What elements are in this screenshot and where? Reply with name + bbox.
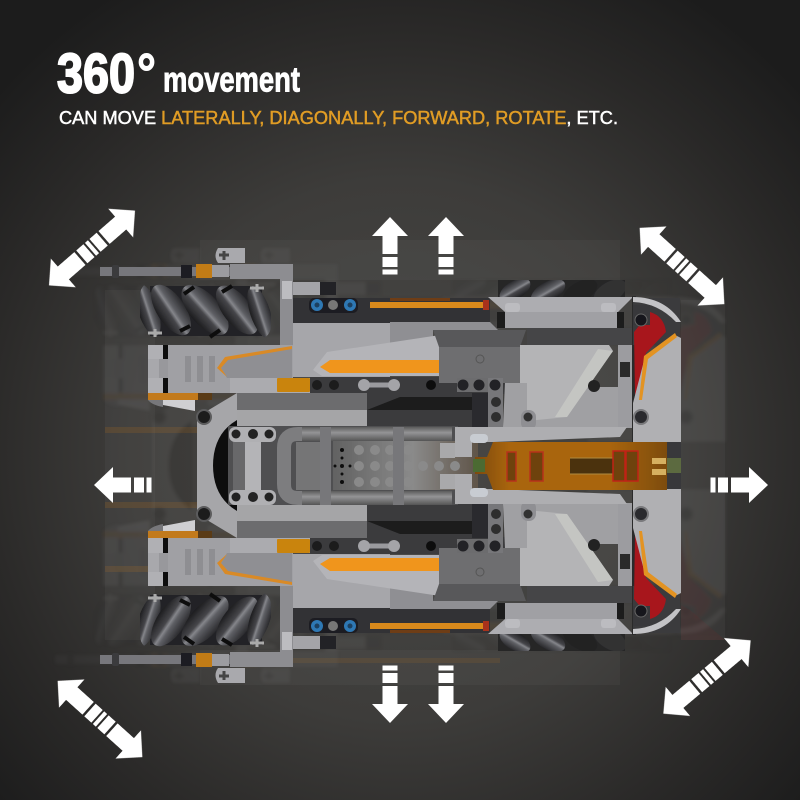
motion ghost of vehicle	[55, 248, 726, 683]
arrow: diagonal upper left	[37, 196, 147, 300]
front bumper centre	[667, 442, 681, 489]
front column	[618, 345, 632, 428]
motion ghost panels	[105, 240, 725, 685]
front clip top	[455, 427, 627, 457]
front corner dark	[633, 298, 680, 345]
side panel light	[390, 322, 498, 345]
rear axle rod	[100, 264, 230, 278]
central dark block	[367, 393, 488, 427]
rear hull grey	[197, 393, 367, 466]
light plate	[503, 345, 630, 427]
orange wing panel	[313, 335, 440, 376]
rear bracket	[229, 427, 276, 505]
dark cross bar	[527, 328, 632, 345]
dark centre strip	[310, 377, 505, 394]
arrow: diagonal lower right	[651, 626, 763, 728]
front wheel	[496, 274, 631, 310]
red light	[634, 312, 666, 396]
dark chassis strip	[293, 298, 490, 328]
vehicle top half	[100, 248, 681, 466]
blue pin beam	[309, 298, 358, 313]
orange rear bar	[148, 393, 212, 411]
rollers	[130, 281, 166, 339]
arrow: up left	[372, 217, 408, 274]
arrow: right	[710, 467, 768, 503]
vehicle	[100, 248, 681, 683]
title	[57, 41, 300, 104]
degree sign: °	[137, 41, 156, 104]
upper side panel	[293, 323, 390, 377]
arrow: down right	[428, 666, 464, 723]
arrow: left	[94, 467, 152, 503]
link connector	[312, 379, 436, 391]
steering arm	[230, 264, 293, 345]
gold cylinder	[277, 378, 310, 392]
seat window	[296, 442, 322, 490]
front fender	[488, 297, 633, 328]
steering collar	[282, 281, 336, 299]
roll bar	[284, 434, 306, 498]
studded floor	[333, 441, 478, 490]
rear tab	[148, 345, 215, 393]
front side panel	[633, 333, 681, 442]
arrow: diagonal lower left	[45, 667, 155, 771]
transparent orange canopy	[473, 442, 667, 490]
vehicle bottom half	[100, 465, 681, 683]
arrows	[37, 196, 768, 771]
cockpit base	[228, 426, 458, 505]
title word: movement	[163, 60, 300, 100]
beam	[457, 378, 503, 427]
arrow: down left	[372, 666, 408, 723]
arrow: diagonal upper right	[627, 214, 737, 318]
loop pin	[521, 410, 536, 430]
rear light bar	[230, 378, 310, 393]
arrow: up right	[428, 217, 464, 274]
cockpit	[228, 426, 681, 505]
dark wedge	[433, 330, 526, 383]
side tubes	[302, 427, 455, 505]
rear wheel	[130, 277, 278, 343]
dark gap	[632, 296, 636, 442]
front clip studs	[470, 434, 488, 497]
title number: 360	[57, 42, 135, 104]
lever plate	[216, 248, 245, 263]
front corner	[633, 297, 681, 326]
subtitle: CAN MOVE LATERALLY, DIAGONALLY, FORWARD, ROTATE, ETC.	[59, 107, 618, 128]
front clip bottom	[455, 474, 627, 504]
orange side stripe	[217, 346, 292, 378]
rear side panel	[148, 345, 293, 393]
orange strip	[370, 298, 489, 310]
